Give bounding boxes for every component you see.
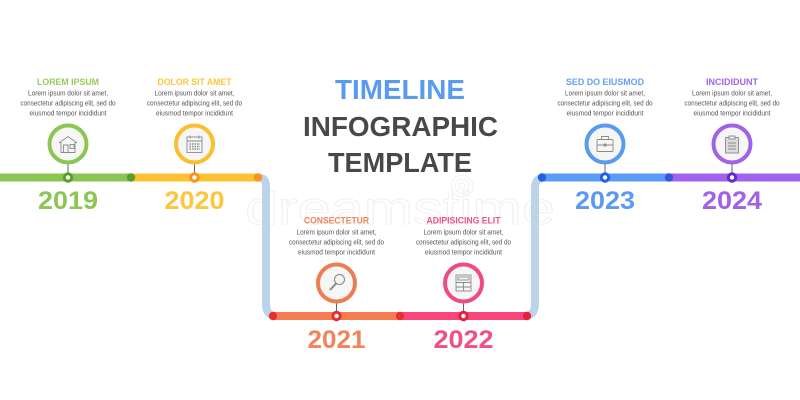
description: consectetur adipiscing elit, sed do <box>558 100 653 108</box>
timeline bar <box>542 174 669 182</box>
milestone 2023 <box>538 77 669 215</box>
start node <box>538 173 546 182</box>
timeline bar <box>131 174 258 182</box>
timeline bar <box>400 312 527 320</box>
description: consectetur adipiscing elit, sed do <box>20 100 116 108</box>
heading: dolor sit amet: DOLOR SIT AMET <box>158 77 232 88</box>
heading: lorem ipsum: LOREM IPSUM <box>37 77 99 88</box>
heading: incididunt: INCIDIDUNT <box>706 77 758 88</box>
heading: consectetur: CONSECTETUR <box>304 216 369 226</box>
description: eiusmod tempor incididunt <box>298 250 375 256</box>
description: consectetur adipiscing elit, sed do <box>289 240 384 246</box>
description: Lorem ipsum dolor sit amet, <box>692 90 772 98</box>
title: TIMELINE <box>335 74 465 105</box>
description: eiusmod tempor incididunt <box>694 110 771 118</box>
year: 2024 <box>702 187 762 215</box>
marker ring <box>714 126 750 162</box>
start node <box>269 312 277 320</box>
description: eiusmod tempor incididunt <box>30 110 107 118</box>
start node <box>665 173 673 182</box>
description <box>147 90 242 118</box>
connector stem <box>194 163 196 175</box>
timeline node <box>64 174 72 181</box>
marker ring <box>176 126 213 162</box>
milestone 2022 <box>396 216 531 354</box>
milestone 2020 <box>127 77 262 215</box>
year: 2022 <box>434 326 494 354</box>
connector stem <box>67 163 69 175</box>
title <box>303 74 498 178</box>
right connector <box>524 178 545 316</box>
year: 2023 <box>575 187 635 215</box>
description: eiusmod tempor incididunt <box>425 250 502 256</box>
description: Lorem ipsum dolor sit amet, <box>154 90 235 98</box>
connector stem <box>604 163 606 175</box>
icon: calculator <box>456 275 471 291</box>
timeline node <box>460 312 467 320</box>
title: INFOGRAPHIC <box>303 111 498 142</box>
description: Lorem ipsum dolor sit amet, <box>424 230 504 236</box>
year: 2019 <box>38 187 98 215</box>
milestone 2024 <box>665 77 800 215</box>
text: dreamstime <box>245 182 555 234</box>
description: Lorem ipsum dolor sit amet, <box>565 90 645 98</box>
milestone 2019 <box>0 77 131 215</box>
icon: clipboard <box>726 136 738 153</box>
end node <box>523 312 531 320</box>
icon: house <box>59 136 77 152</box>
timeline bar <box>0 174 131 182</box>
description <box>289 230 384 256</box>
marker ring <box>318 264 355 302</box>
year: 2020 <box>164 187 224 215</box>
marker ring <box>586 126 624 162</box>
end node <box>254 173 262 182</box>
timeline node <box>191 174 198 181</box>
description: Lorem ipsum dolor sit amet, <box>296 230 377 236</box>
description <box>20 90 116 118</box>
connector stem <box>462 302 464 314</box>
start node <box>396 312 404 320</box>
description <box>684 90 780 118</box>
start node <box>127 173 135 182</box>
icon: magnifier <box>330 274 344 290</box>
description: consectetur adipiscing elit, sed do <box>684 100 780 108</box>
timeline node <box>728 174 736 181</box>
heading: sed do eiusmod: SED DO EIUSMOD <box>566 77 644 88</box>
timeline node <box>601 174 609 181</box>
description: eiusmod tempor incididunt <box>566 110 644 118</box>
description <box>416 230 511 256</box>
marker ring <box>445 264 482 302</box>
title: TEMPLATE <box>328 147 472 178</box>
icon: calendar <box>187 136 202 152</box>
timeline bar <box>273 312 400 320</box>
milestone 2021 <box>269 216 400 354</box>
timeline bar <box>669 174 800 182</box>
left connector <box>258 178 276 316</box>
description: Lorem ipsum dolor sit amet, <box>28 90 108 98</box>
connector stem <box>336 302 338 314</box>
year: 2021 <box>308 326 366 354</box>
description: consectetur adipiscing elit, sed do <box>147 100 242 108</box>
heading: adipisicing elit: ADIPISICING ELIT <box>426 216 501 226</box>
description: eiusmod tempor incididunt <box>156 110 233 118</box>
connector stem <box>731 163 733 175</box>
marker ring <box>50 126 86 162</box>
description: consectetur adipiscing elit, sed do <box>416 240 511 246</box>
description <box>558 90 653 118</box>
timeline node <box>333 312 340 320</box>
icon: briefcase <box>597 136 613 152</box>
